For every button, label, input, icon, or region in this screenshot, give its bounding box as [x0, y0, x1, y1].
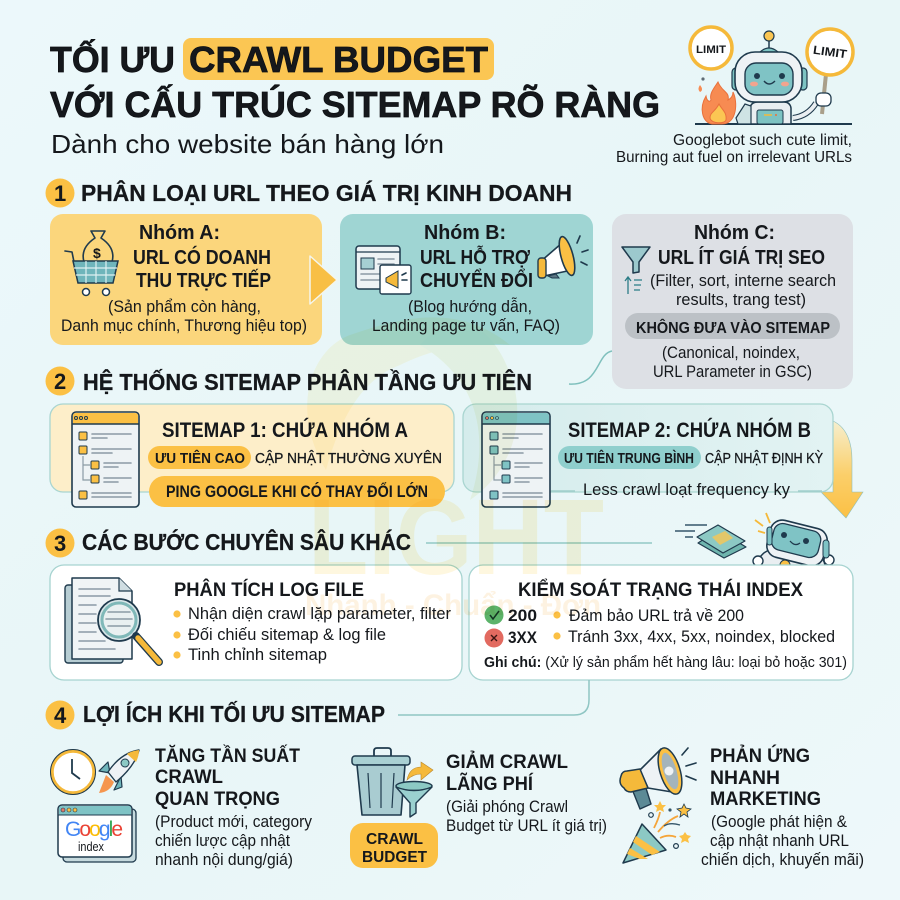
icon: web page with megaphone: [356, 246, 411, 294]
icon: funnel: [622, 247, 650, 273]
panel: Sitemap 1: CẬP NHẬT THƯỜNG XUYÊN: [255, 450, 442, 467]
status 3xx: [484, 628, 538, 648]
robot caption: Burning aut fuel on irrelevant URLs: [616, 149, 852, 166]
benefit: phản ứng nhanh marketing: [620, 743, 864, 869]
section 4 heading: LỢI ÍCH KHI TỐI ƯU SITEMAP: [83, 700, 385, 727]
panel: Sitemap 1: SITEMAP 1: CHỨA NHÓM A: [162, 418, 408, 442]
panel: Nhóm B: CHUYỂN ĐỔI: [420, 268, 533, 292]
panel: Nhóm B: Landing page tư vấn, FAQ): [372, 316, 560, 335]
benefit: phản ứng nhanh marketing: (Google phát hiện &: [711, 813, 847, 831]
benefit: phản ứng nhanh marketing: MARKETING: [710, 788, 821, 810]
panel: Sitemap 1: [50, 404, 454, 507]
panel: kiểm soát trạng thái index: Tránh 3xx, 4xx, 5xx, noindex, blocked: [568, 627, 835, 646]
panel: kiểm soát trạng thái index: [469, 565, 853, 680]
title: TỐI ƯU: [50, 38, 175, 80]
icon: crawl pages with speed lines: [675, 525, 746, 558]
icon: clock: [50, 750, 96, 794]
panel: kiểm soát trạng thái index: KIỂM SOÁT TRẠNG THÁI INDEX: [518, 579, 803, 601]
icon: party popper: [623, 801, 691, 863]
badge: ping google: PING GOOGLE KHI CÓ THAY ĐỔI LỚN: [166, 482, 428, 501]
panel: kiểm soát trạng thái index: Đảm bảo URL trả về 200: [569, 606, 744, 625]
panel: Nhóm A: THU TRỰC TIẾP: [136, 269, 271, 292]
benefit: phản ứng nhanh marketing: PHẢN ỨNG: [710, 743, 810, 767]
panel: Nhóm C: (Filter, sort, interne search: [650, 271, 836, 290]
benefit: tăng tần suất crawl: chiến lược cập nhật: [155, 832, 290, 850]
icon: robot holding limit signs beside a fire: LIMIT: [812, 43, 849, 61]
icon: google index window: index: [78, 840, 105, 854]
panel: Nhóm C: URL Parameter in GSC): [653, 362, 812, 381]
robot caption: Googlebot such cute limit,: [673, 132, 852, 149]
panel: Nhóm B: URL HỖ TRỢ: [420, 245, 531, 269]
panel: Nhóm B: [340, 214, 593, 345]
badge: crawl budget: CRAWL: [366, 831, 423, 848]
section 1 heading: 1: [54, 181, 66, 206]
icon: megaphone: [538, 235, 588, 278]
robot caption: [616, 132, 852, 166]
panel: phân tích log file: PHÂN TÍCH LOG FILE: [174, 579, 364, 601]
icon: small robot: [753, 513, 834, 570]
note: Ghi chú: (Xử lý sản phẩm hết hàng lâu: loại bỏ hoặc 301): [484, 655, 847, 671]
panel: Nhóm C: (Canonical, noindex,: [662, 343, 800, 362]
icon: robot holding limit signs beside a fire: LIMIT: [696, 44, 726, 56]
status 200: [484, 606, 537, 625]
benefit: giảm crawl lãng phí: Budget từ URL ít giá trị): [446, 817, 607, 835]
watermark: [305, 317, 604, 622]
icon: sitemap document teal: [482, 412, 550, 507]
panel: Nhóm A: Nhóm A:: [139, 222, 220, 244]
panel: Sitemap 2: [463, 404, 833, 507]
watermark: LIGHT: [308, 476, 604, 597]
bullet list: Đối chiếu sitemap & log file: [188, 625, 386, 644]
icon: shopping cart with money bag: [65, 231, 118, 296]
panel: phân tích log file: [50, 565, 462, 680]
icon: google index window: Google: [65, 818, 123, 841]
section 3 heading: CÁC BƯỚC CHUYÊN SÂU KHÁC: [82, 528, 411, 555]
benefit: tăng tần suất crawl: CRAWL: [155, 766, 223, 788]
benefit: giảm crawl lãng phí: (Giải phóng Crawl: [446, 798, 568, 816]
benefit: tăng tần suất crawl: (Product mới, category: [155, 813, 313, 831]
section 2 heading: HỆ THỐNG SITEMAP PHÂN TẦNG ƯU TIÊN: [83, 368, 532, 395]
badge: ưu tiên cao: [148, 446, 251, 469]
panel: Nhóm A: URL CÓ DOANH: [133, 245, 271, 269]
benefit: tăng tần suất crawl: TĂNG TẦN SUẤT: [155, 744, 300, 767]
icon: megaphone: [620, 745, 696, 809]
benefit: giảm crawl lãng phí: [350, 748, 607, 868]
badge: không đưa vào sitemap: KHÔNG ĐƯA VÀO SITEMAP: [636, 318, 830, 337]
badge: ưu tiên trung bình: [558, 446, 701, 469]
benefit: tăng tần suất crawl: nhanh nội dung/giá): [155, 851, 293, 869]
panel: Nhóm C: results, trang test): [676, 290, 806, 309]
panel: Nhóm A: (Sản phẩm còn hàng,: [108, 297, 261, 316]
icon: shopping cart with money bag: $: [93, 245, 101, 261]
section 3 heading: 3: [54, 531, 66, 556]
badge: ưu tiên cao: ƯU TIÊN CAO: [155, 449, 245, 467]
icon: document with magnifier: [65, 578, 159, 663]
panel: Nhóm C: Nhóm C:: [694, 222, 775, 244]
icon: google index window: [58, 805, 136, 862]
badge: crawl budget: [350, 823, 438, 868]
arrow: section 3 to chip: [426, 542, 652, 544]
benefit: phản ứng nhanh marketing: chiến dịch, khuyến mãi): [701, 851, 864, 869]
subtitle: Dành cho website bán hàng lớn: [51, 129, 444, 159]
badge: crawl budget: BUDGET: [362, 849, 427, 866]
arrow: Nhóm A to Nhóm B: [310, 256, 337, 304]
bullet list: Nhận diện crawl lặp parameter, filter: [188, 604, 451, 623]
section 2 heading: 2: [54, 369, 66, 394]
badge: ping google: [149, 476, 445, 507]
title: VỚI CẤU TRÚC SITEMAP RÕ RÀNG: [50, 83, 660, 125]
title: [50, 38, 660, 125]
title: CRAWL BUDGET: [189, 39, 488, 80]
benefit: giảm crawl lãng phí: GIẢM CRAWL: [446, 750, 568, 773]
benefit: tăng tần suất crawl: [50, 744, 313, 869]
benefit: giảm crawl lãng phí: LÃNG PHÍ: [446, 772, 534, 795]
section 4 heading: 4: [54, 703, 67, 728]
panel: Nhóm C: [612, 214, 853, 389]
status 3xx: 3XX: [508, 628, 538, 647]
badge: không đưa vào sitemap: [625, 313, 840, 339]
icon: rocket: [99, 750, 139, 793]
badge: ưu tiên trung bình: ƯU TIÊN TRUNG BÌNH: [564, 449, 694, 467]
benefit: tăng tần suất crawl: QUAN TRỌNG: [155, 788, 280, 810]
icon: sort list: [625, 277, 642, 294]
panel: Nhóm B: (Blog hướng dẫn,: [408, 297, 532, 316]
panel: Nhóm C: URL ÍT GIÁ TRỊ SEO: [658, 246, 825, 269]
panel: Sitemap 2: CẬP NHẬT ĐỊNH KỲ: [705, 450, 823, 467]
icon: sitemap document yellow: [72, 412, 139, 507]
section 1 heading: PHÂN LOẠI URL THEO GIÁ TRỊ KINH DOANH: [81, 179, 572, 206]
panel: Sitemap 2: SITEMAP 2: CHỨA NHÓM B: [568, 418, 811, 442]
benefit: phản ứng nhanh marketing: cập nhật nhanh URL: [710, 832, 849, 850]
bullet list: Tinh chỉnh sitemap: [188, 645, 327, 664]
panel: Nhóm A: [50, 214, 322, 345]
bullet list: [173, 604, 451, 664]
status 200: 200: [508, 606, 537, 625]
icon: robot holding limit signs beside a fire: [690, 27, 853, 124]
benefit: phản ứng nhanh marketing: NHANH: [710, 767, 780, 789]
watermark: Nhanh - Chuẩn - Đơn: [305, 589, 601, 622]
panel: Nhóm B: Nhóm B:: [424, 222, 506, 244]
panel: Nhóm A: Danh mục chính, Thương hiệu top): [61, 316, 307, 335]
icon: trash bin with funnel: [352, 748, 433, 817]
arrow: curved yellow down arrow: [821, 421, 863, 518]
panel: Sitemap 2: Less crawl loạt frequency ky: [583, 480, 790, 499]
